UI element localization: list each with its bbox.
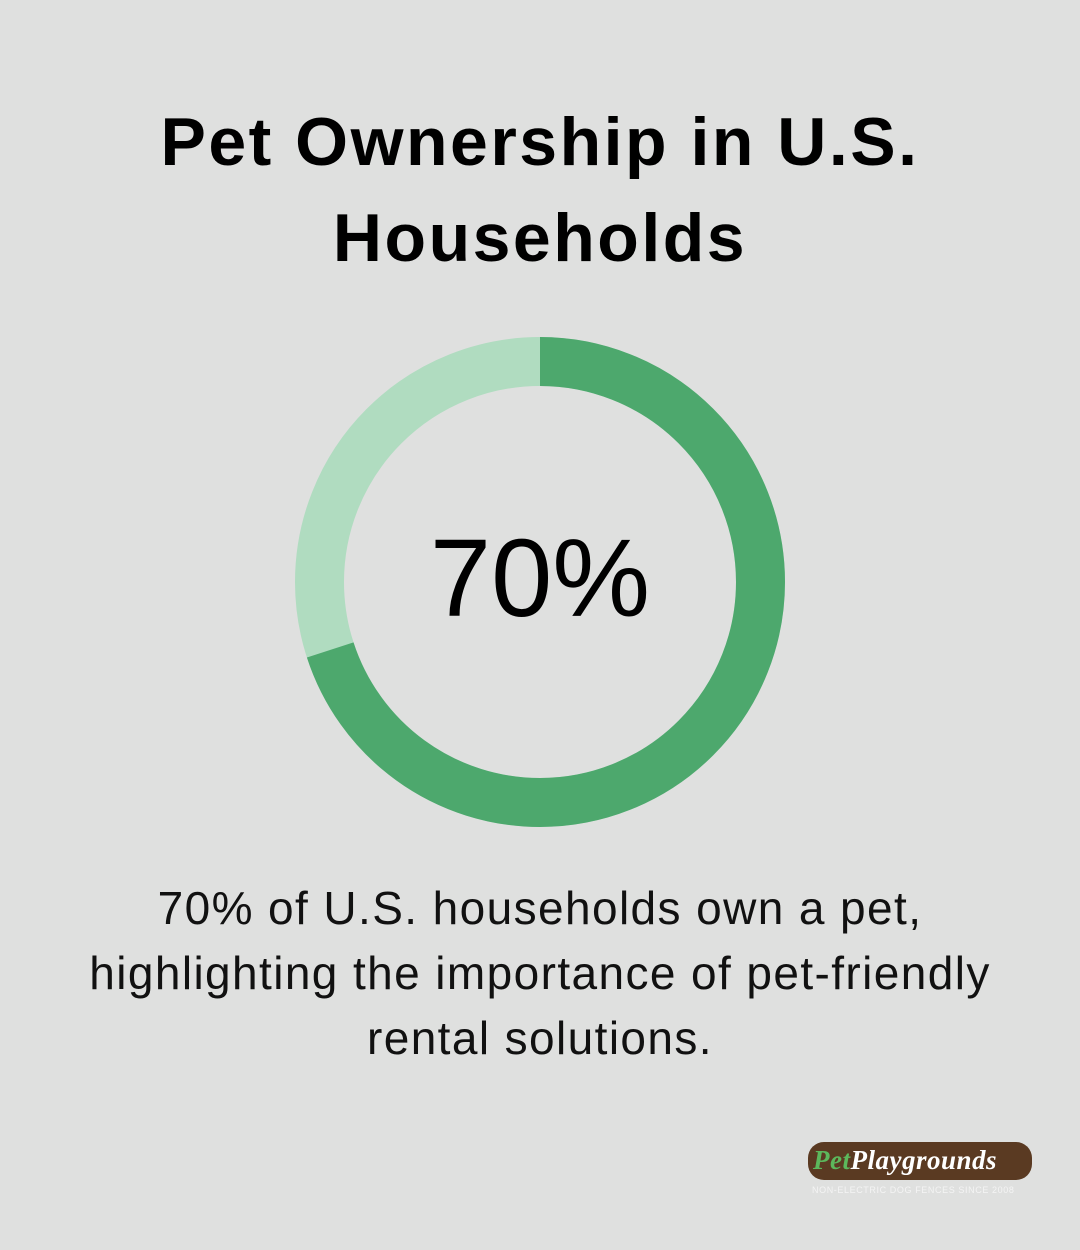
description: highlighting the importance of pet-friendly (89, 947, 991, 999)
donut background ring (320, 362, 760, 802)
donut 70% arc (320, 362, 760, 802)
logo (808, 1142, 1032, 1195)
logo: PetPlaygrounds (813, 1145, 997, 1175)
description: 70% of U.S. households own a pet, (158, 882, 922, 934)
description (89, 882, 991, 1064)
title: Pet Ownership in U.S. (160, 104, 920, 180)
title: Households (333, 200, 747, 276)
center value: 70% (430, 517, 650, 640)
logo: NON-ELECTRIC DOG FENCES SINCE 2008 (812, 1185, 1014, 1195)
description: rental solutions. (367, 1012, 713, 1064)
title (160, 104, 920, 276)
